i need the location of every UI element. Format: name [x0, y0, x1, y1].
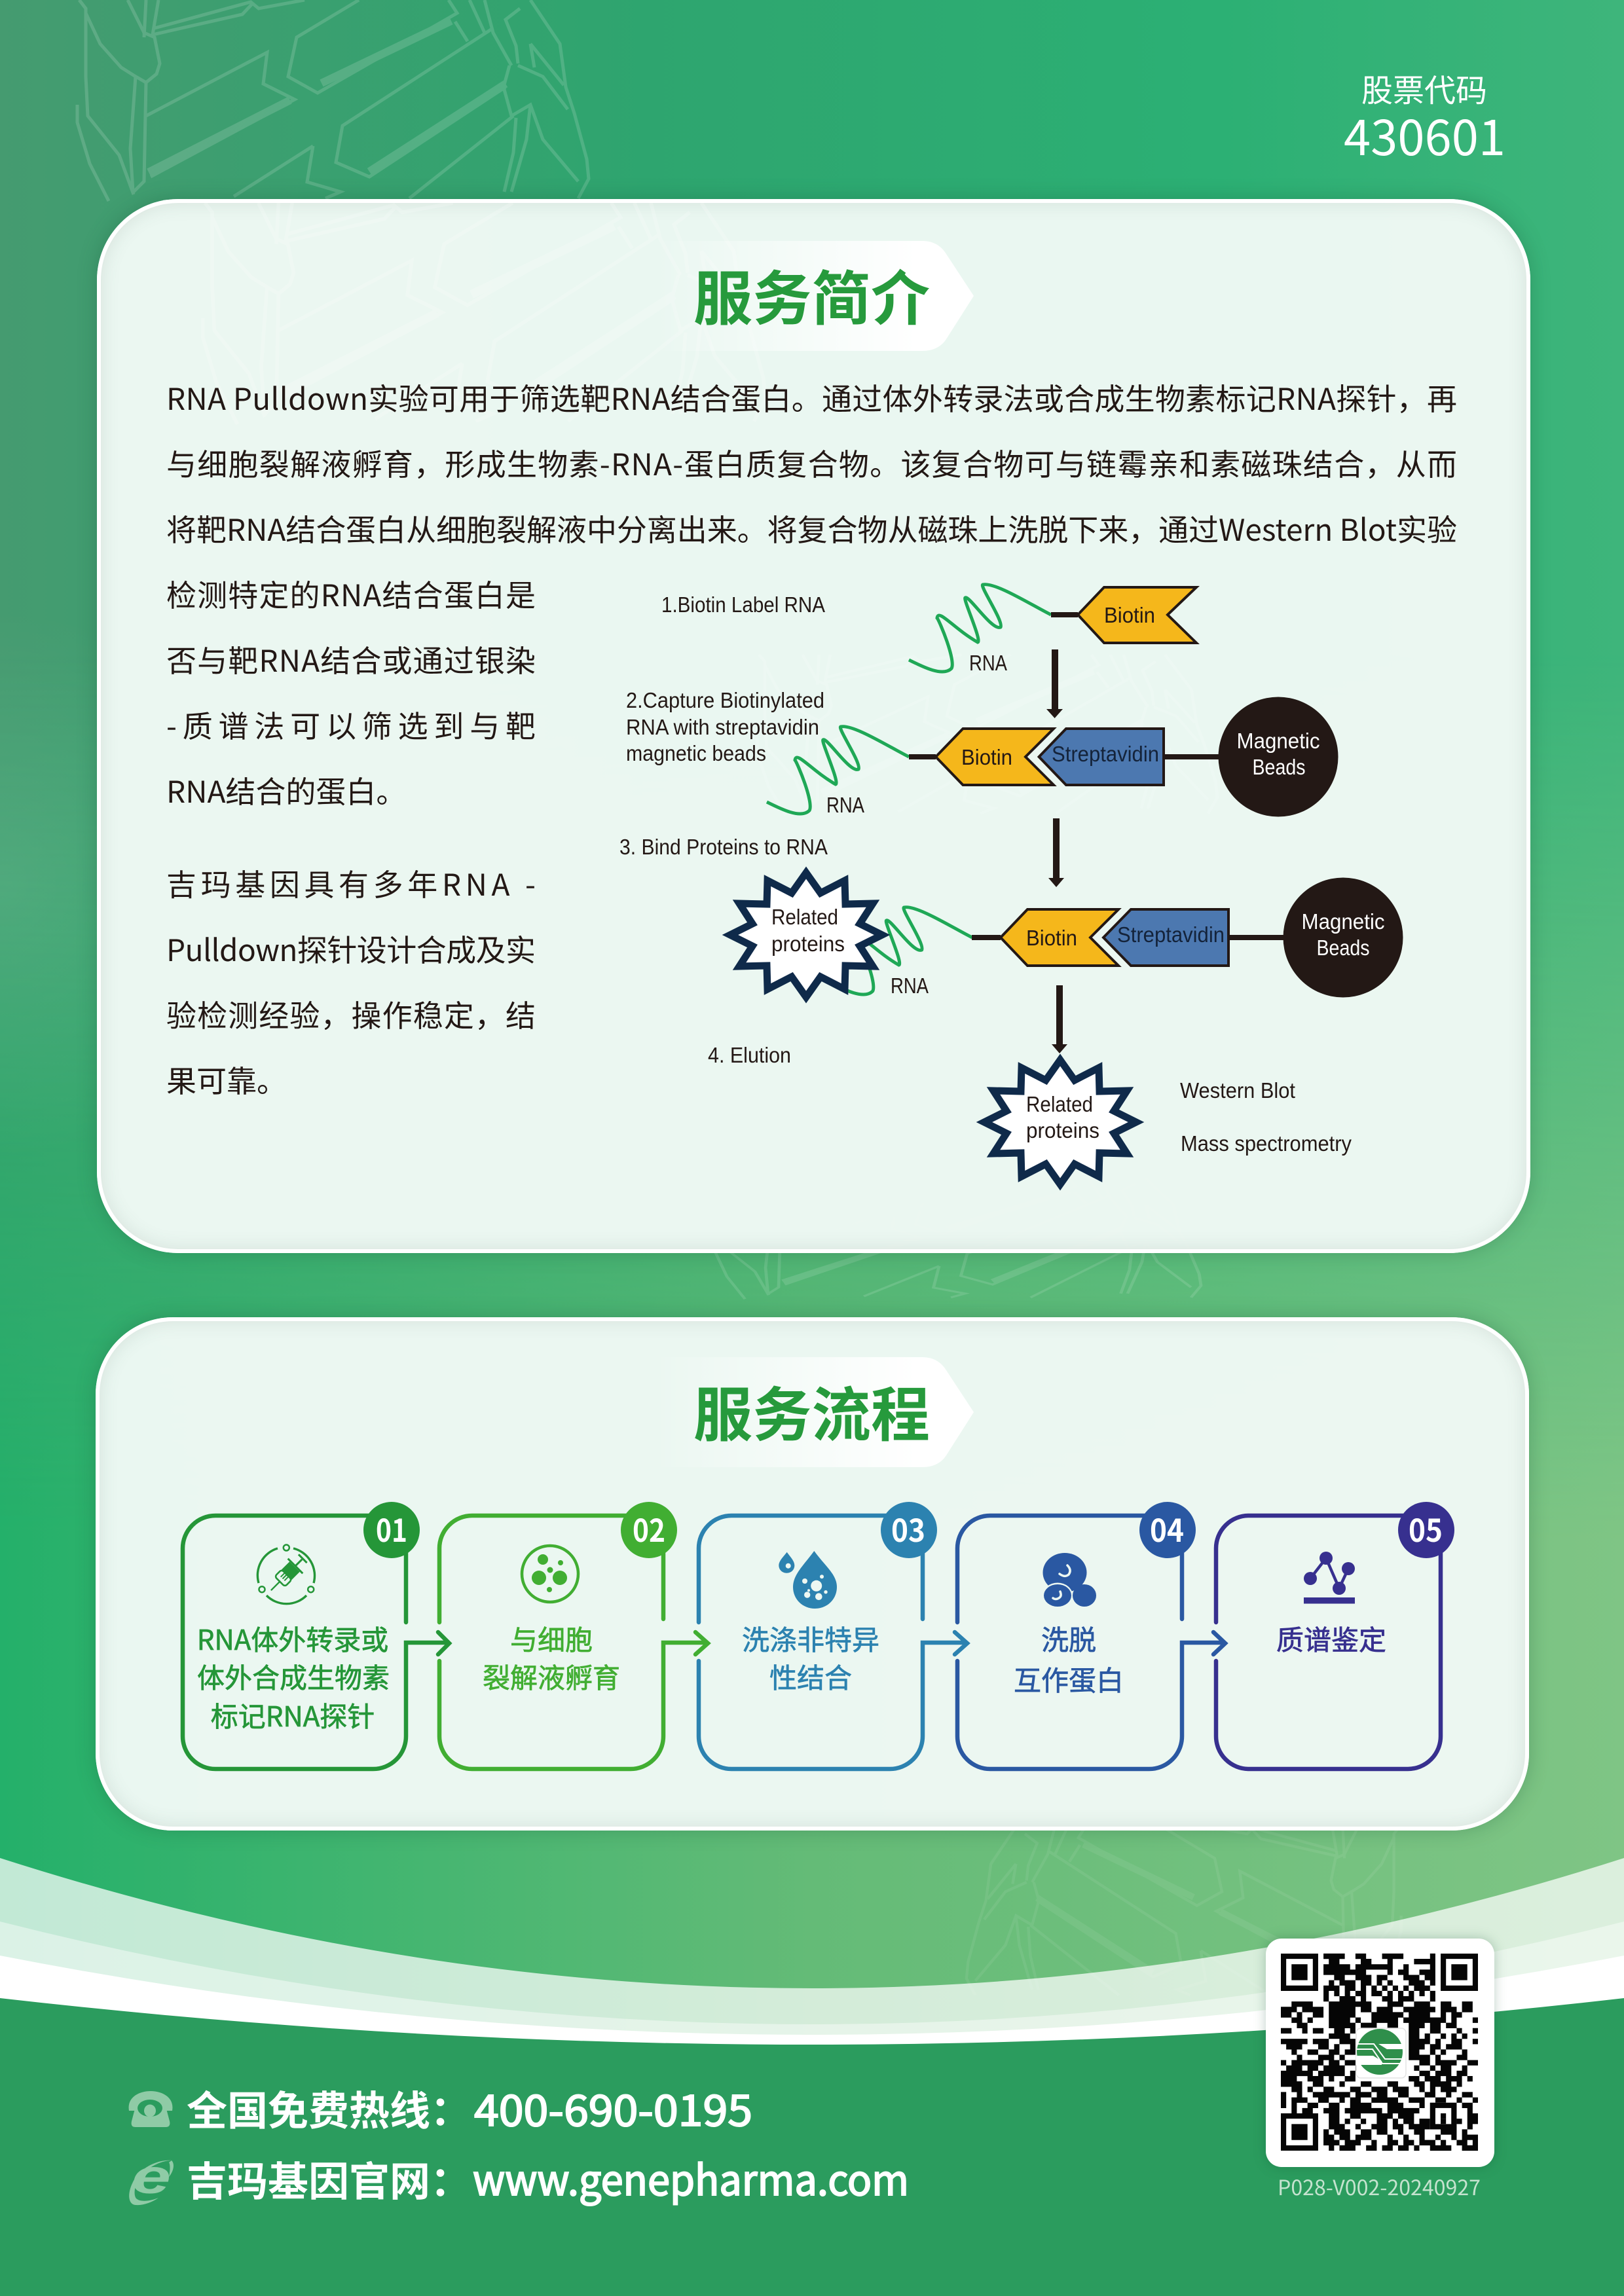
step 4 label: 4. Elution [708, 1043, 791, 1067]
step text 04: 互作蛋白 [1014, 1659, 1124, 1699]
logo in QR code [1356, 2028, 1406, 2078]
arrow 2 [1048, 818, 1064, 887]
step 05 [1216, 1502, 1454, 1769]
icon: cell [522, 1546, 578, 1602]
step text 02: 裂解液孵育 [483, 1656, 620, 1696]
step 3: proteins bound to RNA: Beads [1316, 936, 1370, 960]
step 03: 03 [891, 1505, 925, 1551]
diagram: RNA pulldown workflow [619, 585, 1403, 1184]
heading: 服务简介: 服务简介 [693, 251, 930, 337]
text block: introduction: RNA Pulldown实验可用于筛选靶RNA结合蛋白。通过体外转录法或合成生物素标记RNA探针，再 [166, 376, 1457, 419]
text block: introduction: 与细胞裂解液孵育，形成生物素-RNA-蛋白质复合物。该复合物可与链霉亲和素磁珠结合，从而 [166, 441, 1457, 484]
text block: company experience: 果可靠。 [166, 1058, 287, 1101]
step 4: eluted proteins: proteins [1026, 1118, 1099, 1142]
step 04 [957, 1502, 1225, 1769]
text block: company experience [166, 862, 536, 1101]
step 2: capture on streptavidin magnetic beads: Magnetic [1236, 729, 1320, 753]
text block: introduction: 检测特定的RNA结合蛋白是 [166, 572, 536, 615]
stock code: 股票代码 [1361, 65, 1487, 111]
step 3: proteins bound to RNA: Magnetic [1302, 909, 1384, 934]
icon: syringe [257, 1545, 315, 1604]
icon: water drops [779, 1551, 837, 1609]
step text 01: 体外合成生物素 [197, 1656, 390, 1696]
icon: web e [129, 2149, 174, 2205]
step 3: proteins bound to RNA: proteins [771, 932, 845, 956]
step text 04: 洗脱 [1041, 1618, 1096, 1658]
step 2: capture on streptavidin magnetic beads: Streptavidin [1052, 742, 1159, 766]
step 1: biotin labelled RNA: Biotin [1104, 603, 1155, 627]
website [187, 2147, 909, 2208]
step 2 label: RNA with streptavidin [626, 715, 819, 739]
step 2: capture on streptavidin magnetic beads: RNA [826, 793, 864, 817]
step 3: proteins bound to RNA: Biotin [1026, 926, 1077, 950]
step 4: eluted proteins: Western Blot [1180, 1078, 1295, 1102]
step 1: biotin labelled RNA: RNA [969, 651, 1007, 675]
text block: company experience: Pulldown探针设计合成及实 [166, 927, 536, 970]
step 2 label: magnetic beads [626, 741, 766, 765]
step 4: eluted proteins: Mass spectrometry [1181, 1131, 1352, 1156]
step 03 [699, 1502, 967, 1769]
hotline: 全国免费热线： [187, 2078, 471, 2137]
hotline [187, 2078, 752, 2138]
step 3: proteins bound to RNA [730, 873, 1403, 998]
step text 03 [742, 1618, 879, 1696]
hotline: 400-690-0195 [474, 2078, 752, 2138]
step 05: 05 [1409, 1505, 1443, 1551]
step text 03: 洗涤非特异 [742, 1618, 879, 1658]
step 2: capture on streptavidin magnetic beads [767, 697, 1338, 817]
text block: introduction: 将靶RNA结合蛋白从细胞裂解液中分离出来。将复合物从磁珠上洗脱下来，通过Western Blot实验 [166, 507, 1457, 550]
step text 03: 性结合 [769, 1656, 852, 1696]
document code: P028-V002-20240927 [1278, 2172, 1481, 2202]
step 02: 02 [633, 1505, 665, 1551]
icon: mass spectrum peaks [1304, 1552, 1355, 1604]
step text 04 [1014, 1618, 1124, 1699]
text block: introduction [166, 376, 1457, 812]
text block: company experience: 吉玛基因具有多年RNA - [166, 862, 536, 905]
step 2 label [626, 688, 824, 765]
panel: 服务流程 [96, 1317, 1529, 1831]
text block: introduction: RNA结合的蛋白。 [166, 769, 406, 812]
step 3: proteins bound to RNA: Streptavidin [1117, 922, 1225, 947]
step 2: capture on streptavidin magnetic beads: Beads [1252, 755, 1306, 779]
step 4: eluted proteins [984, 1060, 1352, 1184]
panel: 服务简介 [97, 199, 1530, 1253]
arrow 3 [1052, 985, 1067, 1053]
step text 05: 质谱鉴定 [1276, 1618, 1386, 1658]
step 02 [439, 1502, 708, 1769]
icon: cells [1043, 1553, 1096, 1608]
step text 01: RNA体外转录或 [197, 1618, 388, 1658]
step 01: 01 [376, 1505, 407, 1551]
text block: introduction: 否与靶RNA结合或通过银染 [166, 638, 536, 681]
step 1 label: 1.Biotin Label RNA [661, 592, 825, 617]
icon: telephone [129, 2091, 172, 2127]
step 2: capture on streptavidin magnetic beads: Biotin [961, 745, 1012, 769]
step 3: proteins bound to RNA: Related [771, 905, 838, 929]
heading: 服务流程 [655, 1357, 974, 1467]
step text 02 [483, 1618, 620, 1696]
text block: introduction: -质谱法可以筛选到与靶 [166, 703, 536, 746]
step 3 label: 3. Bind Proteins to RNA [619, 835, 828, 859]
step 04: 04 [1150, 1505, 1184, 1551]
step text 02: 与细胞 [510, 1618, 593, 1658]
website: 吉玛基因官网： [187, 2149, 471, 2208]
arrow 1 [1046, 649, 1063, 718]
heading: 服务简介 [655, 241, 974, 351]
text block: company experience: 验检测经验，操作稳定，结 [166, 993, 536, 1036]
step 3: proteins bound to RNA: RNA [891, 974, 929, 998]
heading: 服务流程: 服务流程 [693, 1368, 930, 1453]
step 4: eluted proteins: Related [1026, 1092, 1093, 1116]
icon: web e: e [132, 2149, 171, 2204]
QR code card [1266, 1939, 1494, 2167]
step text 01 [197, 1618, 390, 1735]
step 1: biotin labelled RNA [909, 585, 1196, 675]
step 01 [183, 1502, 449, 1769]
step text 01: 标记RNA探针 [211, 1695, 375, 1735]
step 2 label: 2.Capture Biotinylated [626, 688, 824, 712]
website: www.genepharma.com [473, 2147, 909, 2208]
stock code: 430601 [1344, 100, 1505, 170]
